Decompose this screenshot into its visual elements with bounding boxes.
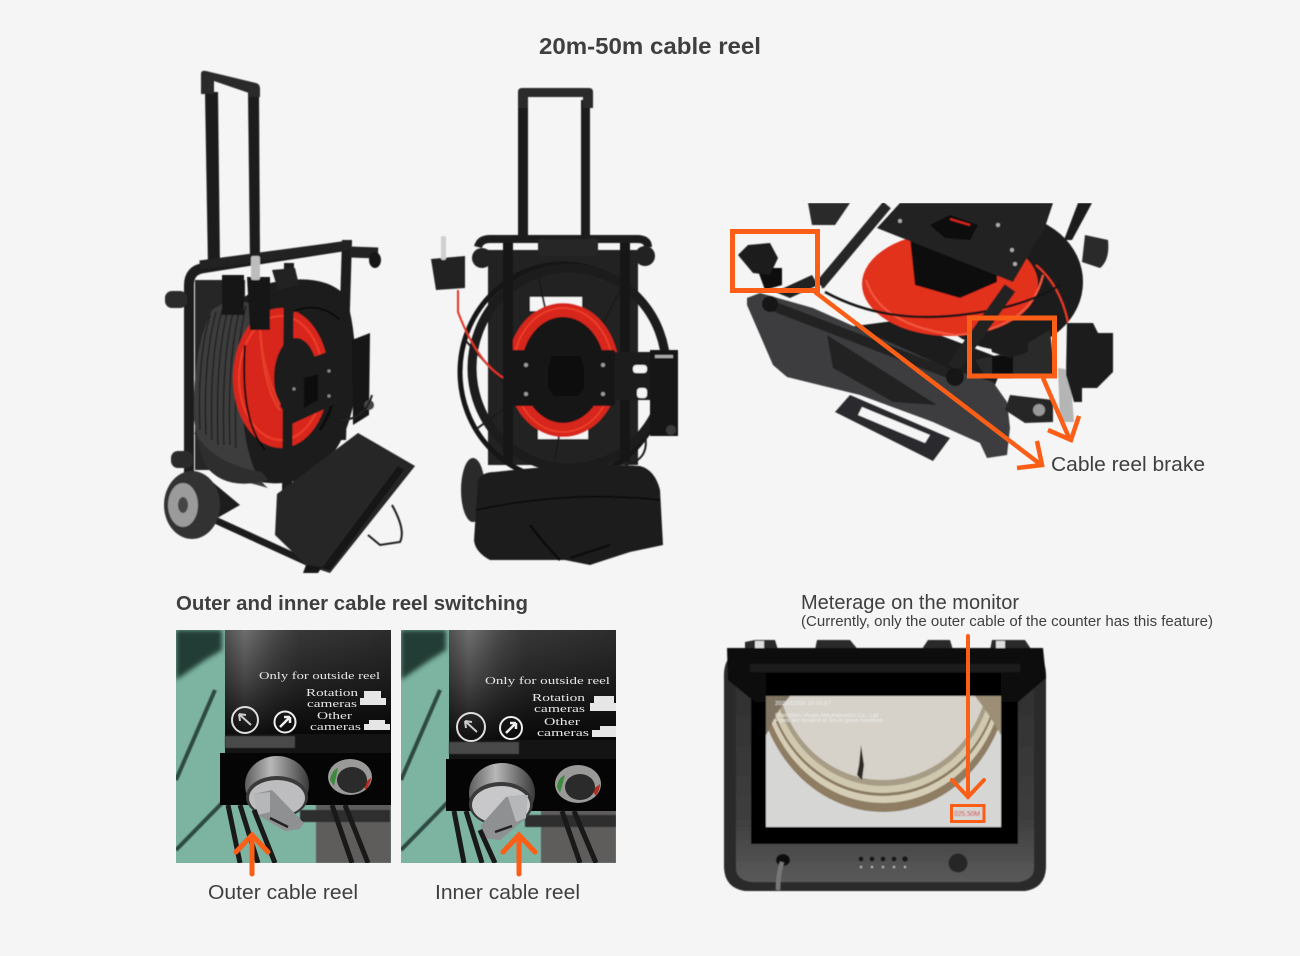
control buttons xyxy=(859,856,908,868)
callout: meterage box xyxy=(952,806,984,822)
panel print: Only for outside reel xyxy=(485,676,610,687)
photo: inner cable reel switch xyxy=(401,630,616,863)
side frame plate xyxy=(747,293,1010,458)
panel print: Only for outside reel xyxy=(259,671,380,682)
photo: outer cable reel switch xyxy=(176,630,391,863)
frame xyxy=(165,246,345,568)
timestamp and caption overlay xyxy=(775,701,883,724)
photo background xyxy=(401,630,616,863)
photo: cable reel cart, angled view xyxy=(164,71,415,573)
switch panel xyxy=(446,630,616,811)
timestamp and caption overlay: 2023/12/09 15:15:57 xyxy=(775,701,831,707)
cable holder and lens xyxy=(431,236,465,290)
black cable ring xyxy=(460,264,666,480)
photo: cable reel cart, rear view xyxy=(431,88,678,565)
arrow: meterage xyxy=(952,636,984,797)
label: outer cable reel: Outer cable reel xyxy=(208,882,358,904)
panel print xyxy=(232,671,390,733)
arrow: left brake to label xyxy=(815,292,1042,468)
photo: cable reel brakes seen from above xyxy=(738,203,1113,461)
back frame xyxy=(488,250,638,465)
carry handle xyxy=(835,395,950,461)
pipe image xyxy=(765,695,1002,828)
arrow: inner switch xyxy=(503,835,535,874)
panel print: Other xyxy=(544,717,581,728)
callout: brake highlight boxes xyxy=(732,232,1054,376)
red cable coil xyxy=(822,232,1068,336)
panel print: cameras xyxy=(537,728,589,739)
red cable coil xyxy=(233,308,342,450)
top hardware bits xyxy=(808,203,1092,240)
cables xyxy=(454,811,596,863)
red cable coil xyxy=(458,290,613,432)
uprights and cross bar xyxy=(472,239,655,462)
cable xyxy=(776,854,790,890)
label: cable reel brake: Cable reel brake xyxy=(1051,454,1205,476)
arrow: outer switch xyxy=(236,835,268,874)
switch panel xyxy=(220,630,391,805)
arrow: right brake to label xyxy=(1043,378,1079,440)
panel print: Other xyxy=(317,711,353,722)
connector clamp and steel hose xyxy=(1005,323,1113,423)
panel print: cameras xyxy=(310,722,361,733)
panel print xyxy=(457,676,616,741)
wheel xyxy=(461,458,485,522)
telescopic handle xyxy=(201,71,260,268)
rotary switch xyxy=(245,756,309,831)
timestamp and caption overlay: Shenzhen Vicam Mechatronics Co., Ltd xyxy=(775,713,878,719)
photo: monitor xyxy=(723,639,1047,892)
rotary switch xyxy=(469,763,535,840)
panel print: cameras xyxy=(307,699,357,710)
brackets and connector xyxy=(222,256,299,410)
timestamp and caption overlay: Pipes are located at 3m in good condition xyxy=(775,718,883,724)
push button xyxy=(555,765,601,803)
monitor body xyxy=(724,655,1046,891)
wheel xyxy=(164,471,220,539)
black cable behind coil xyxy=(854,224,1110,386)
panel print: cameras xyxy=(534,704,585,715)
carry bag xyxy=(474,465,663,565)
mounting plate xyxy=(510,350,615,406)
title: 20m-50m cable reel xyxy=(539,33,761,59)
speaker grille xyxy=(948,854,968,872)
panel print: Rotation xyxy=(532,693,586,704)
monitor top latches xyxy=(745,640,1035,655)
cross bar, uprights and mounting plate xyxy=(200,240,381,495)
carry bag xyxy=(275,433,415,573)
screen xyxy=(751,673,1018,844)
mounting plate xyxy=(877,203,1053,282)
control module xyxy=(340,333,374,425)
cables xyxy=(228,805,368,863)
knob: right brake xyxy=(976,330,1052,379)
black cable coil xyxy=(194,279,356,488)
sun hood xyxy=(727,648,1046,702)
panel print: Rotation xyxy=(306,688,359,699)
photo background xyxy=(176,630,391,863)
side module with mount xyxy=(615,350,678,465)
knob: left brake xyxy=(738,243,818,298)
note: outer cable counter: (Currently, only the outer cable of the counter has this feature) xyxy=(801,614,1213,630)
meterage readout: 025.50M xyxy=(954,811,980,818)
heading: switching: Outer and inner cable reel switching xyxy=(176,593,528,615)
side rails xyxy=(762,205,1010,386)
label: inner cable reel: Inner cable reel xyxy=(435,882,580,904)
push button xyxy=(328,759,372,795)
bezel xyxy=(736,670,1034,882)
heading: meterage: Meterage on the monitor xyxy=(801,592,1019,614)
telescopic handle xyxy=(518,88,593,242)
